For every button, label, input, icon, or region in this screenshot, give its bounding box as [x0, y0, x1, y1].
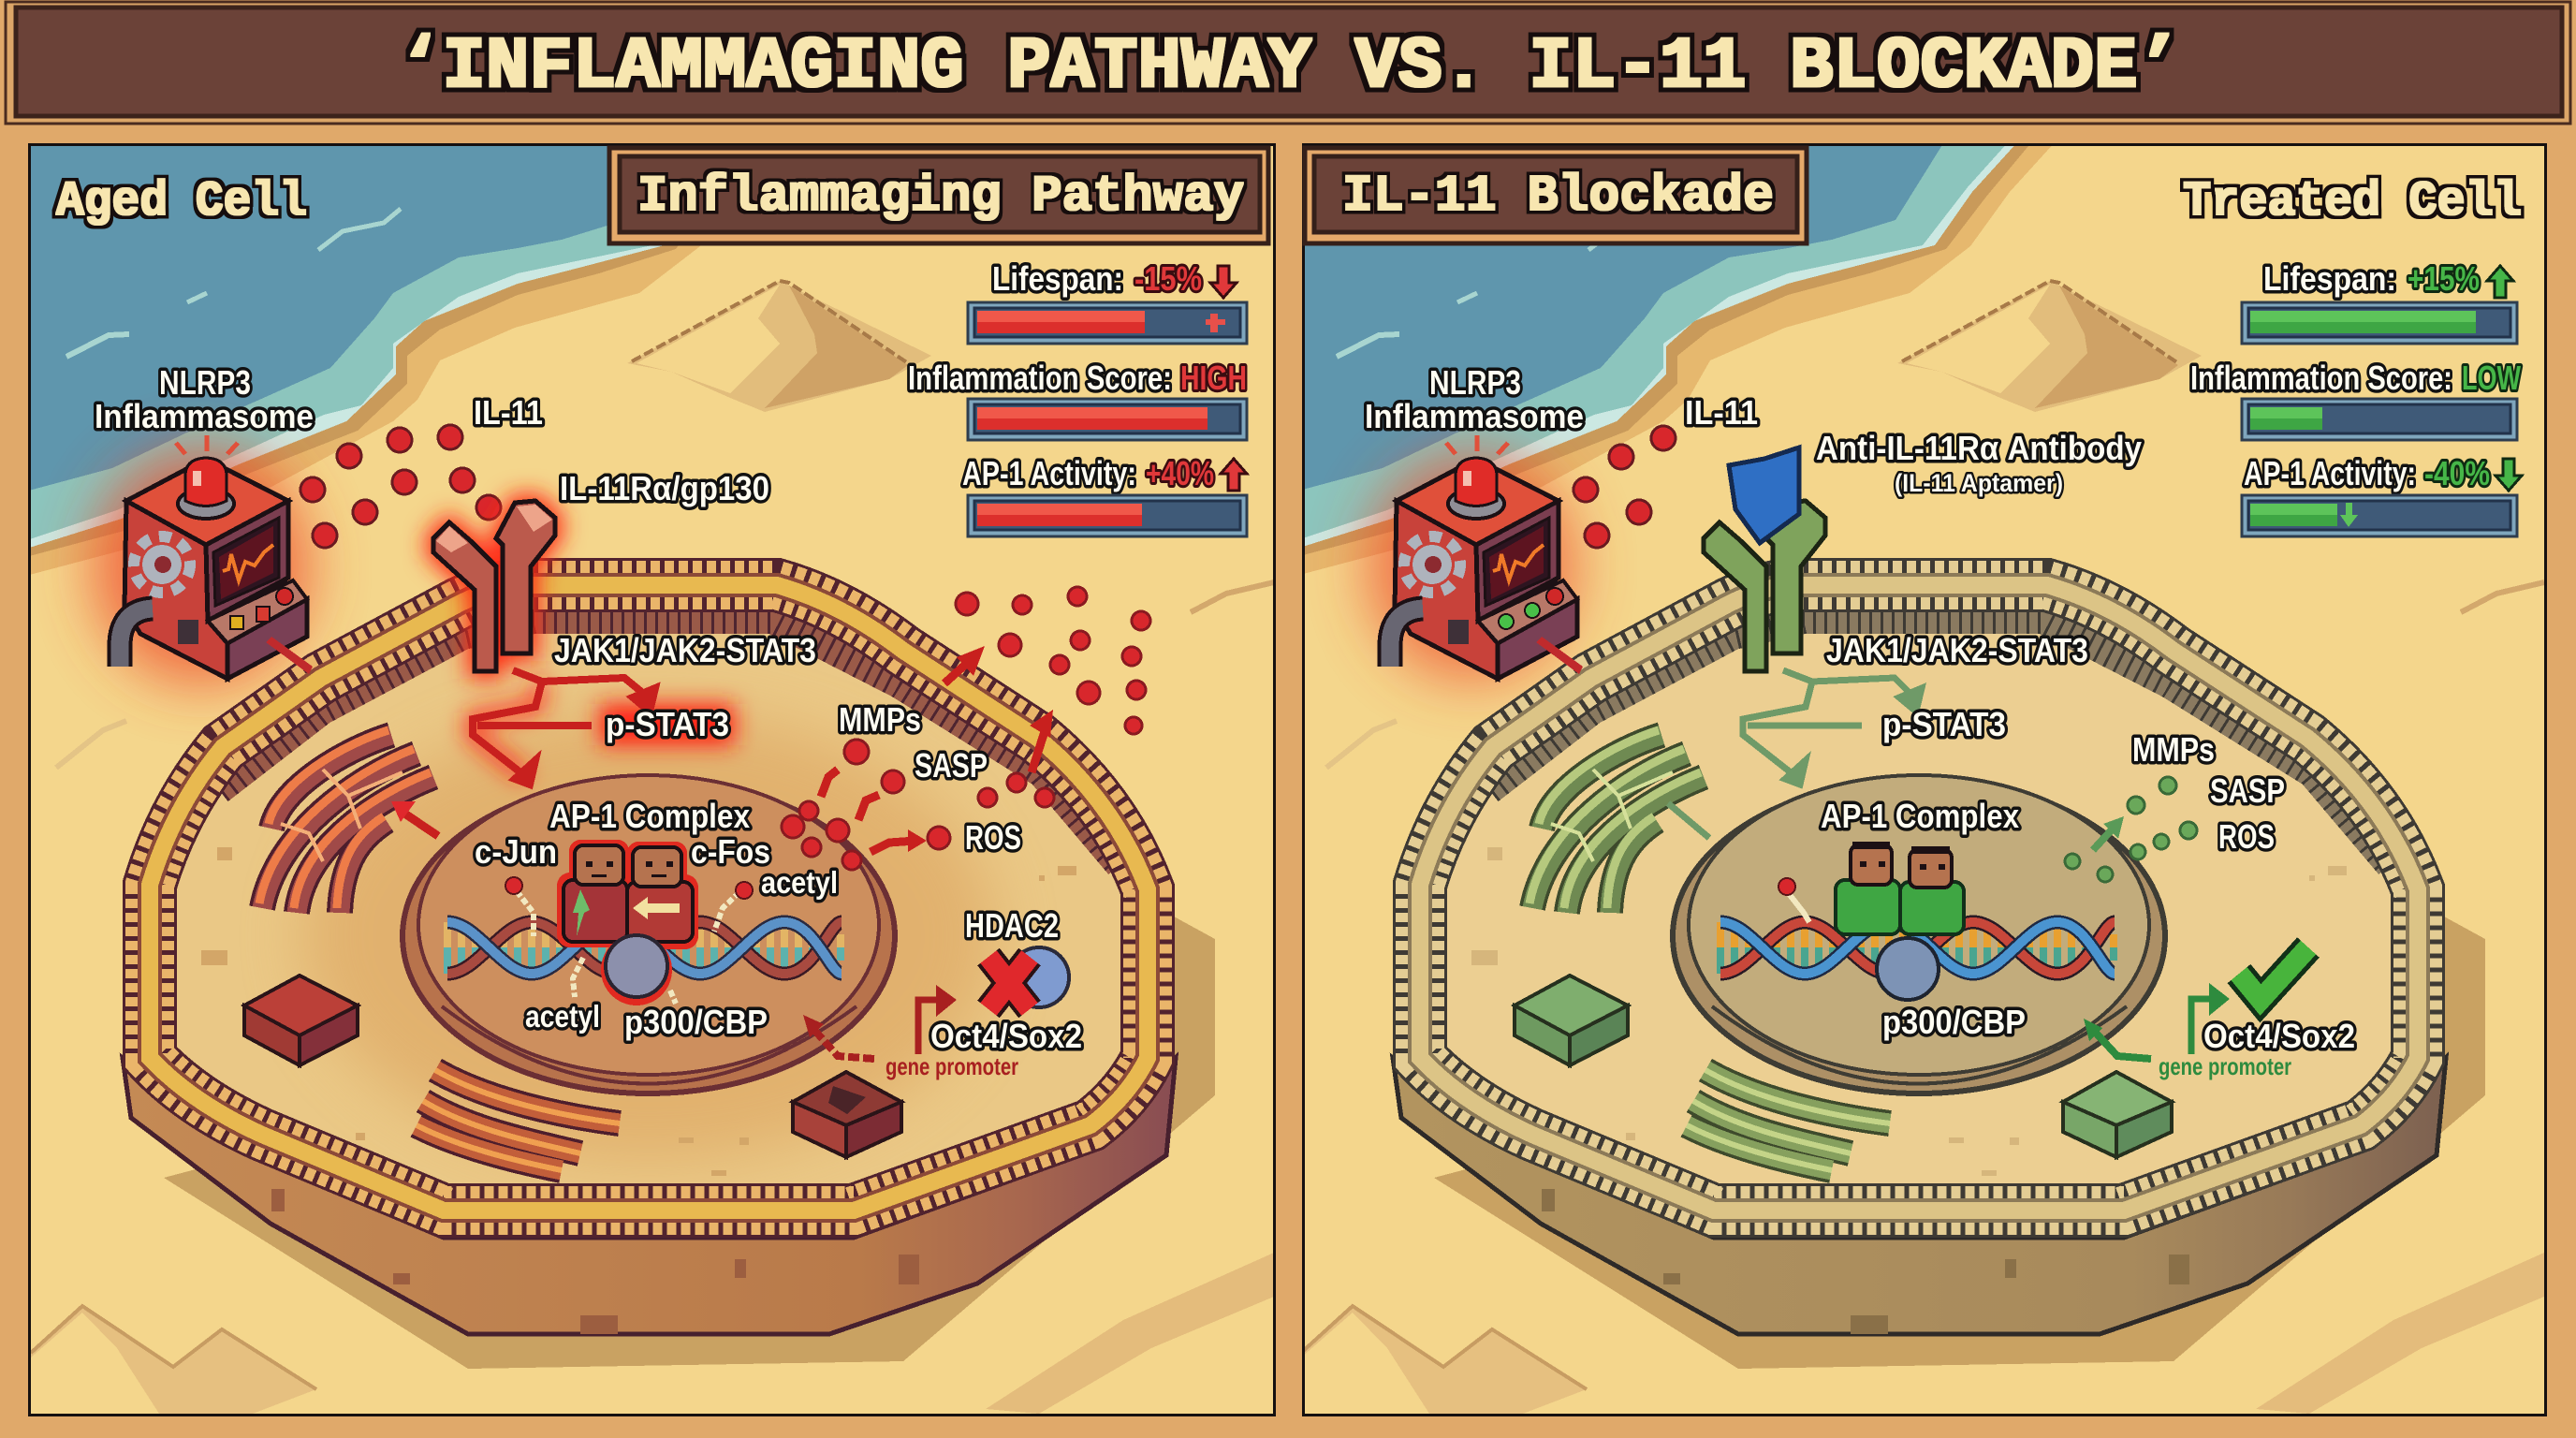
left scene artwork [0, 140, 1320, 1438]
diagram labels right: (IL-11 Aptamer) [1895, 469, 2063, 497]
cytokine release SASP MMPs ROS [782, 587, 1150, 870]
HDAC2 blue ball [1009, 947, 1069, 1007]
cell floor [177, 634, 1120, 1183]
right tab heading [1305, 148, 1807, 243]
machine lights green [1499, 588, 1563, 629]
lysosome cube right [793, 1072, 901, 1157]
cytoplasm specks [201, 847, 1076, 1176]
metric inflammation score treated: LOW [2462, 359, 2521, 397]
diagram labels left: NLRP3 [159, 363, 251, 402]
right scene artwork [1261, 140, 2576, 1438]
cell membrane rim right [1420, 585, 2418, 1211]
cytoplasm tint [302, 712, 995, 1161]
arrow JAK STAT dimmed [1668, 670, 1922, 838]
lysosome cube left right panel [1515, 976, 1628, 1065]
right tab heading: IL-11 Blockade [1342, 167, 1774, 226]
diagram labels left: acetyl [525, 999, 600, 1034]
signal glow p-STAT3 [473, 682, 735, 776]
left panel frame background [31, 146, 1273, 1414]
membrane inner fence [220, 621, 1119, 866]
diagram labels right: IL-11 [1685, 393, 1758, 432]
nucleus right [1673, 775, 2165, 1093]
diagram labels right: ROS [2218, 817, 2275, 856]
metric inflammation score: HIGH [1180, 359, 1247, 397]
icon: blue shield [1729, 448, 1799, 543]
title banner [6, 2, 2570, 124]
IL-11 particles [300, 425, 501, 548]
diagram labels left: JAK1/JAK2-STAT3 [554, 631, 816, 669]
DNA helix [447, 922, 842, 974]
machine lights [230, 588, 293, 629]
cell outer wall right [1393, 1058, 2446, 1334]
diagram labels left: p300/CBP [624, 1003, 768, 1041]
nucleus [402, 775, 895, 1093]
metric lifespan [968, 259, 1247, 344]
metric lifespan treated [2242, 259, 2517, 344]
cytoplasm specks right [1471, 847, 2347, 1176]
cell shadow [164, 912, 1215, 1369]
receptor green [1704, 501, 1825, 671]
p300 CBP blob [601, 934, 672, 1005]
diagram labels left: HDAC2 [965, 906, 1059, 945]
title banner: ‘INFLAMMAGING PATHWAY VS. IL-11 BLOCKADE’ [399, 27, 2181, 109]
diagram labels right: Anti-IL-11Rα Antibody [1816, 429, 2142, 467]
diagram labels left: AP-1 Complex [549, 797, 750, 835]
beach background [0, 140, 1320, 1438]
cell membrane rim [150, 585, 1148, 1211]
acetyl dots [505, 877, 753, 899]
icon: green check [2239, 947, 2308, 1000]
heading treated cell: Treated Cell [2183, 174, 2522, 229]
acetyl chains [517, 891, 739, 1004]
diagram labels left: IL-11 [474, 393, 543, 432]
metric AP-1 activity treated [2242, 454, 2522, 536]
diagram labels right: p300/CBP [1882, 1003, 2026, 1041]
metric inflammation score treated: Inflammation Score: [2190, 359, 2452, 397]
diagram labels right: MMPs [2132, 730, 2215, 769]
diagram labels left: c-Fos [691, 832, 770, 871]
heading aged cell: Aged Cell [56, 174, 307, 229]
cell outer wall [123, 1058, 1176, 1334]
lysosome cube right right panel [2063, 1072, 2172, 1157]
metric AP-1 activity treated: AP-1 Activity: [2244, 454, 2416, 492]
metric inflammation score [908, 359, 1247, 440]
endoplasmic reticulum [259, 730, 433, 913]
endoplasmic reticulum right [1530, 730, 1704, 913]
diagram labels left: c-Jun [475, 832, 557, 871]
arrow JAK STAT signalling [473, 670, 655, 785]
diagram labels left: SASP [915, 746, 988, 785]
AP-1 proteins resting [1836, 842, 1964, 934]
diagram labels right: NLRP3 [1429, 363, 1521, 402]
diagram labels left: p-STAT3 [606, 705, 729, 743]
diagram labels left: Oct4/Sox2 [930, 1017, 1082, 1055]
diagram labels right: SASP [2210, 771, 2285, 810]
icon: machine NLRP3 inflammasome right [1390, 435, 1583, 679]
AP-1 proteins c-Jun and c-Fos [557, 840, 698, 949]
diagram labels left: MMPs [839, 700, 921, 739]
arrow from nucleus to ER [391, 801, 438, 836]
reduced cytokines [2065, 777, 2197, 882]
metric lifespan: -15% [1134, 259, 1202, 298]
diagram labels left: Inflammasome [95, 397, 314, 435]
left tab heading: Inflammaging Pathway [637, 169, 1244, 226]
diagram labels left: IL-11Rα/gp130 [560, 469, 769, 507]
membrane inner fence right [1490, 621, 2389, 866]
icon: machine NLRP3 inflammasome [120, 435, 313, 679]
metric lifespan treated: Lifespan: [2263, 259, 2396, 298]
diagram labels right: Inflammasome [1365, 397, 1584, 435]
diagram labels right: AP-1 Complex [1821, 797, 2019, 835]
metric lifespan treated: +15% [2408, 259, 2480, 298]
p300 CBP blob right [1877, 938, 1939, 1000]
machine glow [94, 449, 309, 683]
metric AP-1 activity: +40% [1146, 454, 1214, 492]
lysosome cube left [244, 976, 358, 1065]
cell floor right [1420, 585, 2418, 1211]
metric inflammation score: Inflammation Score: [908, 359, 1172, 397]
arrow gene promoter [803, 985, 957, 1059]
diagram labels right [1365, 363, 2355, 1080]
diagram labels right: JAK1/JAK2-STAT3 [1826, 631, 2088, 669]
receptor IL-11Ra gp130 [433, 501, 555, 671]
diagram labels right: Oct4/Sox2 [2203, 1017, 2355, 1055]
diagram labels left: ROS [965, 818, 1021, 857]
golgi bands [417, 1070, 620, 1170]
metric AP-1 activity [962, 454, 1247, 536]
golgi bands right [1687, 1070, 1890, 1170]
DNA helix right [1720, 922, 2115, 974]
arrow gene promoter green [2084, 983, 2230, 1059]
left tab heading [609, 148, 1268, 243]
cell shadow right [1434, 912, 2485, 1369]
metric lifespan: Lifespan: [992, 259, 1123, 298]
metric inflammation score treated [2190, 359, 2521, 440]
cell scene right [1390, 435, 2485, 1369]
icon: red X [988, 957, 1030, 1009]
metric AP-1 activity: AP-1 Activity: [962, 454, 1136, 492]
diagram labels right: p-STAT3 [1882, 705, 2006, 743]
right panel frame background [1305, 146, 2544, 1414]
beach background right [1261, 140, 2576, 1438]
metric AP-1 activity treated: -40% [2424, 454, 2490, 492]
diagram labels left: acetyl [761, 865, 838, 900]
panel: treated cell IL-11 blockade [1261, 140, 2576, 1438]
diagram labels left: gene promoter [886, 1052, 1018, 1080]
acetyl chain right [1778, 878, 1809, 922]
diagram labels left [95, 363, 1082, 1080]
diagram labels right: gene promoter [2159, 1052, 2291, 1080]
machine glow right [1368, 454, 1574, 679]
panel: aged cell inflammaging pathway [0, 140, 1320, 1438]
IL-11 particles right [1573, 426, 1676, 548]
